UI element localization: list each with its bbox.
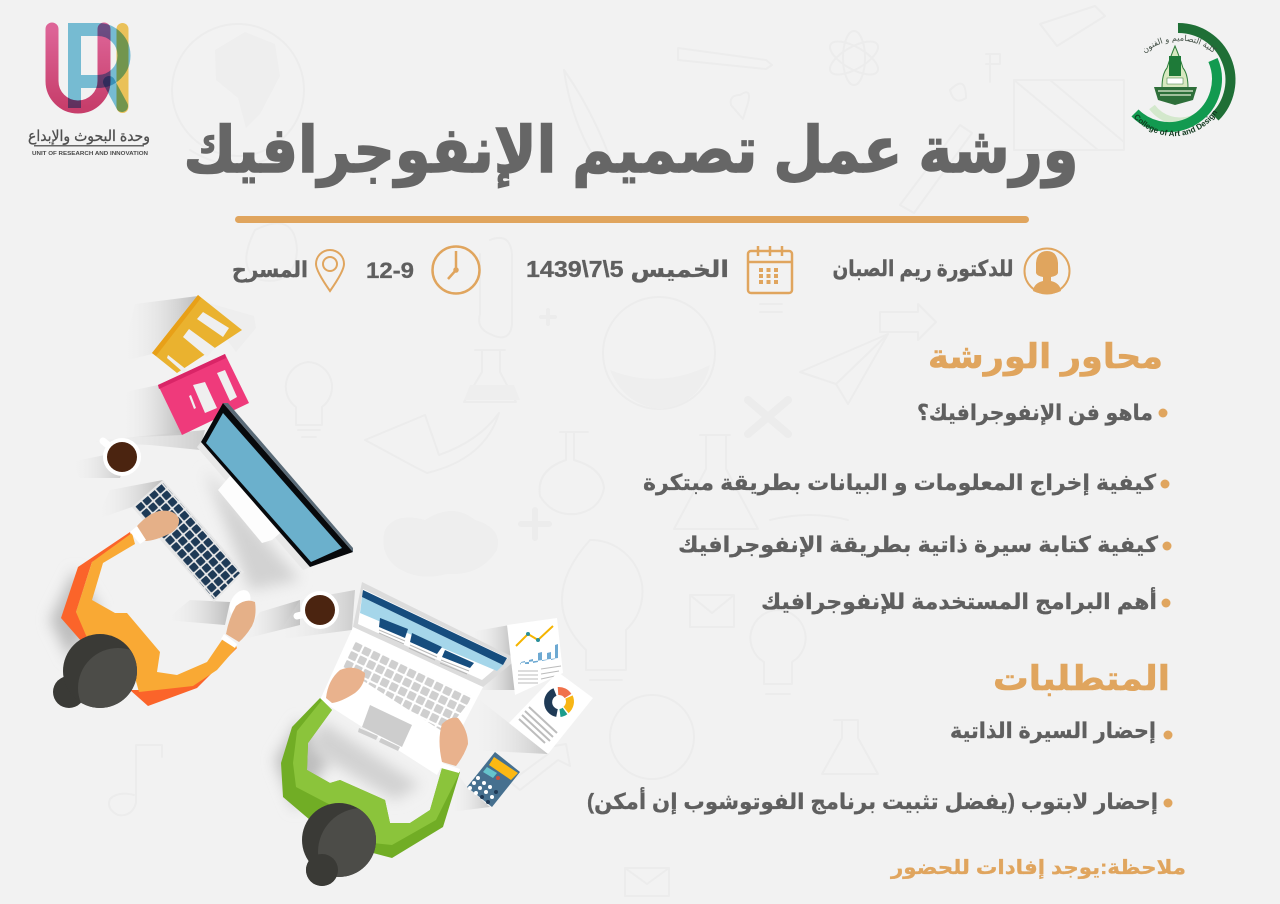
- title: ورشة عمل تصميم الإنفوجرافيك: [184, 114, 1078, 188]
- donut chart paper: [509, 672, 593, 754]
- time: 12-9: [366, 258, 414, 283]
- icon: pink book: [158, 354, 249, 435]
- background doodles: [109, 6, 1124, 896]
- topic 1: ماهو فن الإنفوجرافيك؟: [917, 400, 1153, 426]
- info row: [232, 246, 1070, 294]
- heading: requirements: المتطلبات: [993, 660, 1170, 698]
- topic list: [643, 400, 1172, 615]
- english curved name: College of Art and Design: [1134, 110, 1218, 136]
- monitor: [197, 403, 353, 570]
- head: [306, 854, 338, 886]
- hand on keyboard: [133, 511, 179, 541]
- keyboard: [132, 480, 244, 602]
- left hand: [326, 668, 365, 703]
- icon: coffee cup: [103, 438, 141, 476]
- mouse and hand: [225, 586, 255, 620]
- icon: yellow book: [152, 295, 256, 373]
- illustration shadows: [50, 296, 548, 812]
- right hand: [440, 718, 468, 766]
- logo mark: [52, 29, 124, 108]
- arabic curved name: كلية التصاميم و الفنون: [1144, 34, 1217, 53]
- title rule: [235, 216, 1029, 223]
- requirement 1: إحضار السيرة الذاتية: [950, 718, 1156, 744]
- requirement 2: إحضار لابتوب (يفضل تثبيت برنامج الفوتوشوب إن أمكن): [587, 786, 1158, 815]
- head: [53, 676, 85, 708]
- heading: workshop topics: محاور الورشة: [928, 338, 1163, 377]
- logo arabic name: وحدة البحوث والإبداع: [28, 128, 150, 145]
- topic 4: أهم البرامج المستخدمة للإنفوجرافيك: [761, 586, 1157, 615]
- chart paper: [507, 618, 563, 695]
- calculator: [467, 752, 520, 807]
- URI logo: [28, 29, 150, 157]
- presenter name: للدكتورة ريم الصبان: [832, 256, 1014, 282]
- date: الخميس 5\7\1439: [526, 256, 729, 282]
- icon: presenter: [1024, 248, 1070, 294]
- coffee cup: [297, 591, 339, 629]
- icon: calendar: [748, 246, 792, 293]
- emblem: [1154, 46, 1197, 105]
- note: ملاحظة:يوجد إفادات للحضور: [890, 857, 1186, 879]
- topic 3: كيفية كتابة سيرة ذاتية بطريقة الإنفوجرافيك: [678, 532, 1158, 558]
- college logo: [1132, 23, 1236, 136]
- orange person: [53, 511, 256, 728]
- requirements list: [587, 718, 1172, 815]
- green person: [281, 668, 468, 896]
- icon: clock: [432, 246, 480, 294]
- laptop: [320, 582, 517, 775]
- topic 2: كيفية إخراج المعلومات و البيانات بطريقة مبتكرة: [643, 470, 1156, 496]
- logo english name: UNIT OF RESEARCH AND INNOVATION: [32, 151, 148, 157]
- venue: المسرح: [232, 257, 308, 283]
- icon: location pin: [316, 250, 344, 291]
